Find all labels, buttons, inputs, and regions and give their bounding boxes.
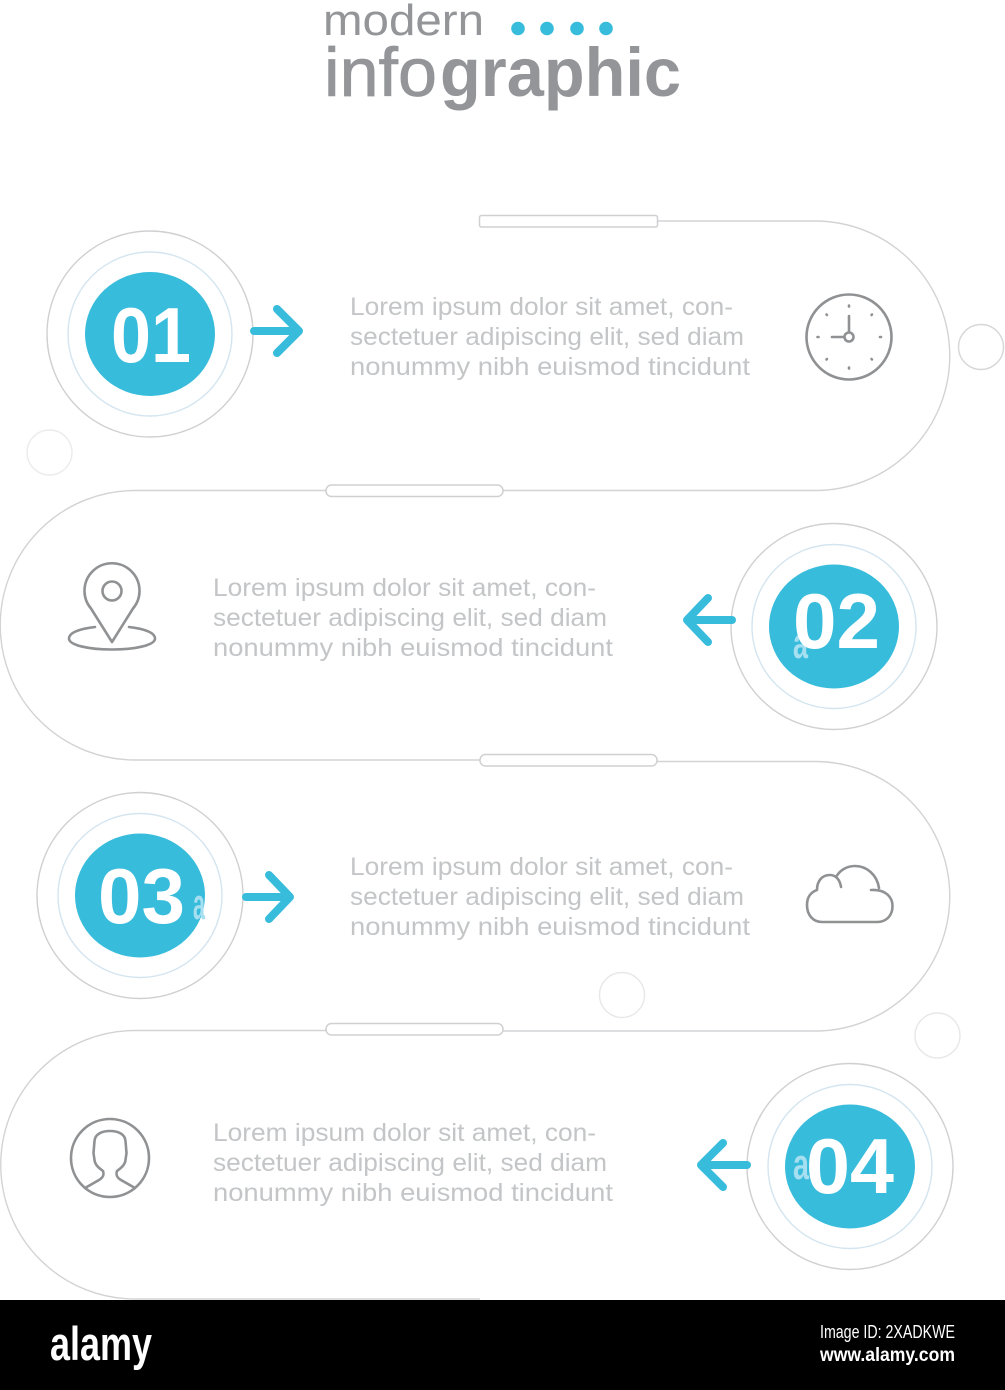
- arrow 01: [254, 309, 299, 353]
- arrow 02: [687, 598, 732, 642]
- step 01 badge: 01: [111, 291, 191, 379]
- text block 03: Lorem ipsum dolor sit amet, con-: [350, 853, 733, 881]
- text block 02: [213, 574, 613, 662]
- arrow 03: [246, 875, 290, 919]
- text block 03: nonummy nibh euismod tincidunt: [350, 913, 750, 941]
- text block 03: [350, 853, 750, 941]
- text block 03: sectetuer adipiscing elit, sed diam: [350, 883, 744, 911]
- step 04 badge: 04: [806, 1122, 894, 1210]
- image id: Image ID: 2XADKWE: [820, 1322, 955, 1342]
- text block 01: [350, 293, 750, 381]
- step 03 badge: 03: [98, 852, 185, 940]
- text block 02: nonummy nibh euismod tincidunt: [213, 634, 613, 662]
- decorative small circles: [27, 324, 1004, 1058]
- step 03 badge: [37, 792, 243, 998]
- winding path connector: [0, 216, 950, 1299]
- step 02 badge: 02: [793, 577, 880, 665]
- title: graphic: [440, 34, 681, 111]
- text block 02: sectetuer adipiscing elit, sed diam: [213, 604, 607, 632]
- icon: clock: [806, 294, 892, 380]
- step 04 badge: [747, 1064, 953, 1270]
- footer bar: [0, 1300, 1005, 1390]
- text block 04: nonummy nibh euismod tincidunt: [213, 1179, 613, 1207]
- website: www.alamy.com: [819, 1345, 955, 1366]
- step 04 badge: a: [793, 1140, 809, 1189]
- text block 01: sectetuer adipiscing elit, sed diam: [350, 323, 744, 351]
- title: [323, 0, 681, 111]
- text block 02: Lorem ipsum dolor sit amet, con-: [213, 574, 596, 602]
- text block 04: Lorem ipsum dolor sit amet, con-: [213, 1119, 596, 1147]
- icon: cloud: [807, 866, 892, 922]
- text block 04: sectetuer adipiscing elit, sed diam: [213, 1149, 607, 1177]
- step 02 badge: a: [793, 619, 808, 668]
- alamy logo: alamy: [50, 1317, 152, 1370]
- text block 01: Lorem ipsum dolor sit amet, con-: [350, 293, 733, 321]
- step 01 badge: [47, 231, 253, 437]
- icon: user: [71, 1119, 149, 1197]
- step 02 badge: [731, 524, 937, 730]
- text block 01: nonummy nibh euismod tincidunt: [350, 353, 750, 381]
- icon: map pin: [69, 563, 155, 650]
- arrow 04: [701, 1143, 747, 1187]
- step 03 badge: a: [193, 880, 205, 929]
- text block 04: [213, 1119, 613, 1207]
- title: info: [324, 34, 437, 111]
